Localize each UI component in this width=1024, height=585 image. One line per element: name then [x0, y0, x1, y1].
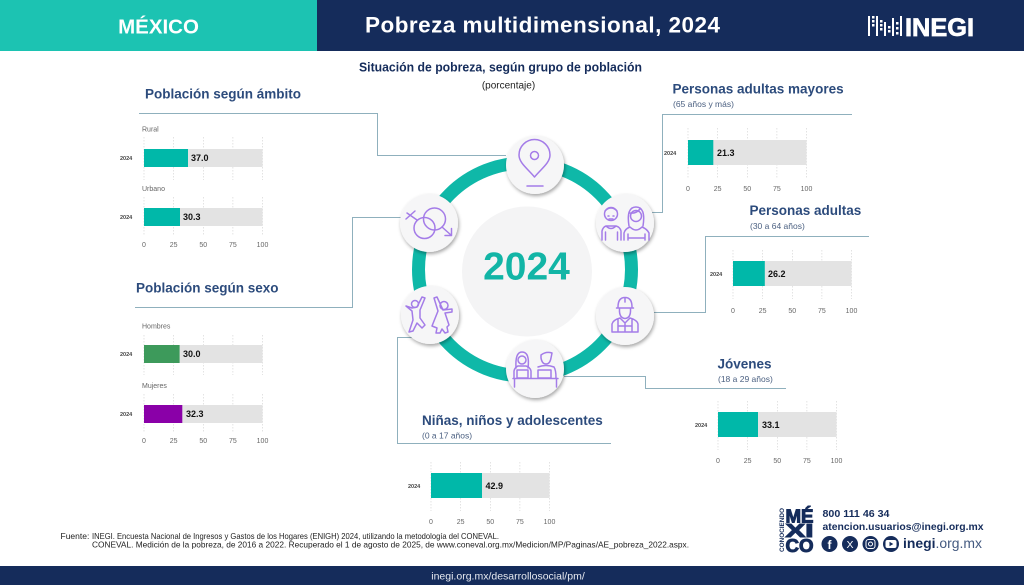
icon: children jumping — [401, 286, 459, 344]
title: Pobreza multidimensional, 2024 — [365, 12, 720, 38]
bar chart: women: 32.3 — [186, 409, 204, 419]
panel: youth — [695, 356, 842, 465]
icon: location pin — [506, 136, 564, 194]
bar chart: children: 2024 — [408, 484, 421, 490]
bar chart: women: 75 — [229, 438, 237, 445]
subheading: youth: (18 a 29 años) — [718, 374, 773, 384]
bar chart: children — [408, 462, 555, 526]
heading: ámbito: Población según ámbito — [145, 86, 301, 102]
bar chart: adults: 50 — [788, 308, 796, 315]
logo: Conociendo México: CONOCIENDO — [780, 508, 786, 552]
bar chart: older adults: 0 — [686, 186, 690, 193]
icon: youtube — [883, 536, 899, 552]
unit note: (porcentaje) — [482, 80, 535, 92]
heading: youth: Jóvenes — [718, 356, 772, 372]
subheading: older adults: (65 años y más) — [673, 99, 734, 109]
bar chart: rural: 37.0 — [191, 153, 209, 163]
heading: adults: Personas adultas — [750, 203, 861, 218]
year label: 2024 — [483, 246, 570, 288]
website: inegi.org.mx — [903, 536, 982, 551]
bar chart: adults: 25 — [759, 308, 767, 315]
bar chart: older adults: 100 — [801, 186, 812, 193]
bar chart: men: 2024 — [120, 352, 133, 358]
heading: children: Niñas, niños y adolescentes — [422, 413, 603, 428]
bar chart: women: Mujeres — [142, 383, 167, 390]
panel: older adults — [664, 82, 844, 193]
bar chart: women — [120, 383, 268, 445]
bar chart: adults: 75 — [818, 308, 826, 315]
heading: older adults: Personas adultas mayores — [672, 82, 844, 96]
bar chart: urban: Urbano — [142, 186, 165, 193]
bar chart: children: 100 — [544, 519, 555, 526]
bar chart: youth: 0 — [716, 458, 720, 465]
central ring diagram — [400, 136, 654, 398]
logo: Conociendo México — [780, 506, 814, 556]
bar chart: men: 30.0 — [183, 349, 201, 359]
icon: instagram — [862, 536, 878, 552]
bar chart: youth: 2024 — [695, 423, 708, 429]
bar chart: older adults: 75 — [773, 186, 781, 193]
email: atencion.usuarios@inegi.org.mx — [822, 522, 984, 533]
bar chart: children: 75 — [516, 519, 524, 526]
connector lines — [135, 114, 869, 444]
source note — [60, 531, 689, 550]
icon: older adults — [596, 194, 654, 252]
icon: adult worker — [596, 287, 654, 345]
subheading: children: (0 a 17 años) — [422, 430, 472, 440]
main heading — [359, 60, 642, 92]
bar chart: youth: 33.1 — [762, 420, 780, 430]
logo: INEGI — [868, 14, 974, 42]
panel: population by sex — [120, 280, 279, 445]
bar chart: women: 25 — [170, 438, 178, 445]
icon: X: X — [846, 539, 854, 551]
bar chart: women: 50 — [199, 438, 207, 445]
header: country: MÉXICO — [118, 16, 199, 38]
bar chart: men — [120, 324, 262, 375]
bar chart: children: 25 — [457, 519, 465, 526]
bar chart: rural: 2024 — [120, 156, 133, 162]
bar chart: rural: Rural — [142, 126, 159, 134]
icon: X — [842, 536, 858, 552]
panel: children and adolescents — [408, 413, 603, 526]
bar chart: urban — [120, 186, 268, 249]
bar chart: urban: 30.3 — [183, 212, 201, 222]
main heading: Situación de pobreza, según grupo de población — [359, 60, 642, 74]
icon: gender symbols — [400, 194, 458, 252]
bar chart: adults — [710, 250, 857, 315]
bar chart: older adults: 50 — [743, 186, 751, 193]
header band — [0, 0, 1024, 51]
bar chart: older adults: 2024 — [664, 151, 677, 157]
bar chart: women: 2024 — [120, 412, 133, 418]
bar chart: adults: 26.2 — [768, 269, 786, 279]
bar chart: adults: 0 — [731, 308, 735, 315]
bar chart: older adults — [664, 128, 812, 193]
icon: facebook: f — [828, 538, 832, 552]
bar chart: urban: 0 — [142, 242, 146, 249]
bar chart: rural — [120, 126, 262, 180]
logo: Conociendo México: CO — [786, 536, 814, 556]
footer band — [0, 566, 1024, 585]
bar chart: urban: 100 — [257, 242, 268, 249]
bar chart: children: 0 — [429, 519, 433, 526]
heading: sexo: Población según sexo — [136, 280, 279, 296]
bar chart: adults: 100 — [846, 308, 857, 315]
bar chart: women: 100 — [257, 438, 268, 445]
subheading: adults: (30 a 64 años) — [750, 221, 805, 231]
icon: youth at desks — [506, 340, 564, 398]
bar chart: youth: 75 — [803, 458, 811, 465]
bar chart: children: 42.9 — [486, 481, 503, 491]
bar chart: older adults: 25 — [714, 186, 722, 193]
bar chart: youth: 50 — [773, 458, 781, 465]
bar chart: urban: 25 — [170, 242, 178, 249]
logo: Conociendo México: MÉ — [786, 506, 814, 526]
logo: INEGI: INEGI — [905, 14, 974, 42]
bar chart: urban: 50 — [199, 242, 207, 249]
bar chart: children: 50 — [486, 519, 494, 526]
bar chart: older adults: 21.3 — [717, 148, 735, 158]
source note: INEGI. Encuesta Nacional de Ingresos y Gastos de los Hogares (ENIGH) 2024, utilizando la metodología del CONEVAL. — [92, 531, 499, 541]
bar chart: urban: 2024 — [120, 215, 133, 221]
bar chart: youth: 100 — [831, 458, 842, 465]
bar chart: urban: 75 — [229, 242, 237, 249]
logo: Conociendo México: XI — [786, 521, 814, 541]
bar chart: men: Hombres — [142, 324, 171, 330]
panel: adults — [710, 203, 861, 315]
source note: Fuente: — [60, 531, 89, 541]
footer url: inegi.org.mx/desarrollosocial/pm/ — [431, 570, 585, 582]
bar chart: youth — [695, 401, 842, 465]
panel: population by area — [120, 86, 301, 249]
source note: CONEVAL. Medición de la pobreza, de 2016 a 2022. Recuperado el 1 de agosto de 2025, de www.coneval.org.mx/Medicion/MP/Paginas/AE_pobreza_2022.aspx. — [92, 540, 689, 550]
bar chart: youth: 25 — [744, 458, 752, 465]
bar chart: women: 0 — [142, 438, 146, 445]
contact details — [822, 509, 984, 552]
phone: 800 111 46 34 — [822, 509, 890, 520]
icon: facebook — [822, 536, 838, 552]
bar chart: adults: 2024 — [710, 272, 723, 278]
